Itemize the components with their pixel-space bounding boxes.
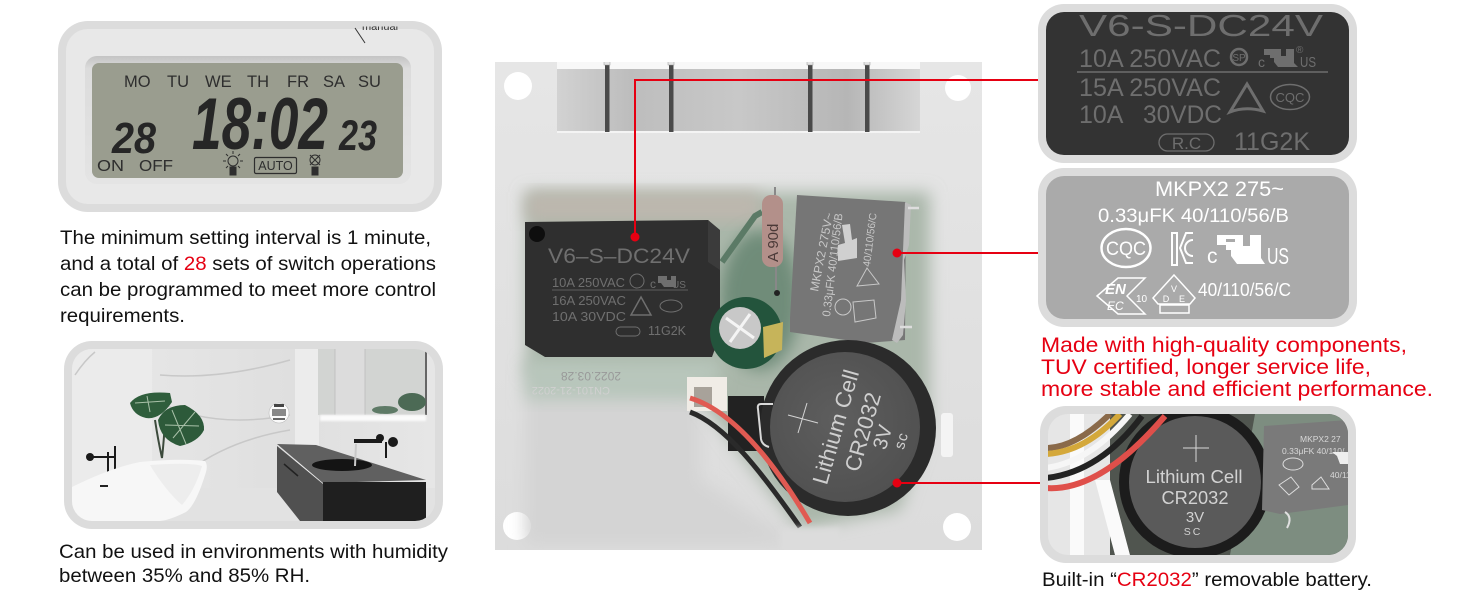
icon: VDE: E [1179,294,1185,304]
on off labels: ON [97,158,124,175]
board [495,62,982,550]
text: high quality components: more stable and efficient performance. [1041,377,1433,401]
plant [130,392,204,458]
film capacitor: 40/110/56/C [861,212,880,267]
text: setting interval: requirements. [60,305,185,327]
icon: VDE: V [1171,284,1177,294]
resistor: A 90d [765,224,782,262]
text: setting interval [60,227,436,327]
vanity [277,434,426,521]
battery cell: sc [891,430,912,451]
icon: R.C: R.C [1172,134,1201,153]
relay spec text: 10A [1079,101,1124,129]
LCD bezel [85,56,411,184]
text: humidity: between 35% and 85% RH. [59,565,310,587]
capacitor spec text: US [1267,243,1289,269]
weekday labels: FR [287,73,309,91]
text: setting interval: can be programmed to meet more control [60,279,436,301]
relay: 16A 250VAC [552,293,626,308]
bathtub [72,460,207,521]
weekday labels [124,73,381,91]
panel: circuit board photo [495,58,982,553]
text: setting interval: The minimum setting interval is 1 minute, [60,227,431,249]
seconds: 23 [338,112,377,160]
lower board shading [518,404,756,540]
manual label and pointer line: manual [362,21,398,33]
capacitor spec text: c [1207,245,1218,268]
capacitor spec text: 40/110/56/C [1198,279,1291,300]
relay spec text: ® [1296,45,1304,56]
callout line: capacitor [894,250,1040,256]
cell: 3V [1186,509,1204,526]
program number: 28 [111,114,156,163]
battery wires [690,398,810,527]
wall [152,349,435,488]
icon: UR mark [1264,49,1298,67]
icon: ENEC: EN [1105,281,1127,298]
icon: ENEC [1097,278,1148,314]
icon: UR mark [1217,235,1265,264]
icon: CQC: CQC [1276,90,1304,105]
icon: CSA: SP [1232,53,1246,64]
text: high quality components: TUV certified, longer service life, [1041,355,1371,379]
weekday labels: WE [205,73,232,91]
text: humidity [59,541,448,587]
relay: 11G2K [648,323,686,338]
icon: CQC: CQC [1106,239,1146,260]
cell [1129,416,1261,548]
panel: relay specs [1038,4,1357,163]
PCB area [526,192,930,530]
relay: V6–S–DC24V [548,245,690,268]
icon: VDE: D [1163,294,1170,304]
capacitor [1262,420,1351,528]
battery cell: 3V [869,422,897,452]
weekday labels: SU [358,73,381,91]
capacitor spec text [1098,178,1291,300]
relay [525,220,720,357]
callout line: battery [894,480,1040,486]
cell: SC [1184,526,1202,538]
battery cell: CR2032 [840,390,886,474]
on off labels [97,158,173,175]
floor [72,488,435,521]
relay spec text: 10A 250VAC [1079,45,1221,73]
relay spec text: US [1300,54,1316,71]
cell: Lithium Cell [1146,466,1242,487]
capacitor spec text: MKPX2 275~ [1155,178,1284,201]
icon: lit bulb [223,151,243,175]
text: high quality components [1041,333,1433,401]
relay spec text: 30VDC [1143,101,1222,129]
icon: CQC [1102,229,1150,267]
relay: 10A 250VAC [552,275,625,290]
board print: 2022.03.28 [561,369,621,383]
callout line: relay [632,80,1040,240]
relay spec text: 11G2K [1234,128,1310,156]
LCD screen [92,63,403,178]
relay spec text: V6-S-DC24V [1079,8,1323,43]
icon: CSA [1231,49,1247,65]
weekday labels: SA [323,73,345,91]
on off labels: OFF [139,158,173,175]
panel: circuit board photo: CN101-21-2022 [532,384,610,396]
film capacitor: MKPX2 275V~ [807,211,836,293]
icon: ENEC: 10 [1136,294,1148,305]
AUTO badge: AUTO [258,159,293,173]
panel: battery photo [1040,406,1356,563]
capacitor: 40/11 [1330,470,1351,480]
text: battery caption: Built-in “CR2032” removable battery. [1042,569,1372,591]
relay spec text: 15A 250VAC [1079,74,1221,102]
relay spec text [1079,8,1323,156]
text: high quality components: Made with high-quality components, [1041,333,1407,357]
panel: LCD timer display [58,21,442,212]
capacitor spec text: 0.33μFK 40/110/56/B [1098,205,1289,227]
relay: c [650,277,656,291]
battery cell: Lithium Cell [808,367,864,487]
icon: R.C [1159,134,1214,153]
capacitor: 0.33μFK 40/110/ [1282,446,1345,456]
icon: off bulb [310,155,320,175]
relay: US [672,280,686,291]
connector [687,377,764,451]
mounting holes [503,72,971,541]
white notch [941,413,953,457]
icon: VDE [1153,275,1195,313]
mirror [318,349,427,421]
panel: capacitor specs [1038,168,1357,327]
holder [1119,414,1266,555]
wall timer [269,403,289,423]
film capacitor [790,195,919,343]
electrolytic capacitor [710,297,783,369]
wires [1046,414,1165,488]
icon: triangle [1230,84,1263,112]
text: humidity: Can be used in environments with humidity [59,541,448,563]
cell: CR2032 [1162,487,1228,508]
film capacitor: 0.33μFK 40/110/56/B [821,212,846,317]
battery holder [760,340,936,516]
icon: ENEC: EC [1107,299,1124,313]
bath taps [94,446,116,472]
icon: CQC [1270,84,1310,110]
terminal slot [557,69,920,132]
battery cell [758,352,920,502]
weekday labels: MO [124,73,151,91]
weekday labels: TU [167,73,189,91]
weekday labels: TH [247,73,269,91]
clock digits: 18:02 [192,84,328,165]
text: setting interval: and a total of 28 sets of switch operations [60,253,436,275]
relay spec text: c [1258,54,1265,70]
manual label and pointer line [350,21,410,43]
icon: KC [1172,233,1193,265]
panel: bathroom photo [64,341,443,529]
terminal pins [604,58,870,132]
resistor [762,187,783,296]
capacitor: MKPX2 27 [1300,434,1341,444]
relay: 10A 30VDC [552,309,626,324]
